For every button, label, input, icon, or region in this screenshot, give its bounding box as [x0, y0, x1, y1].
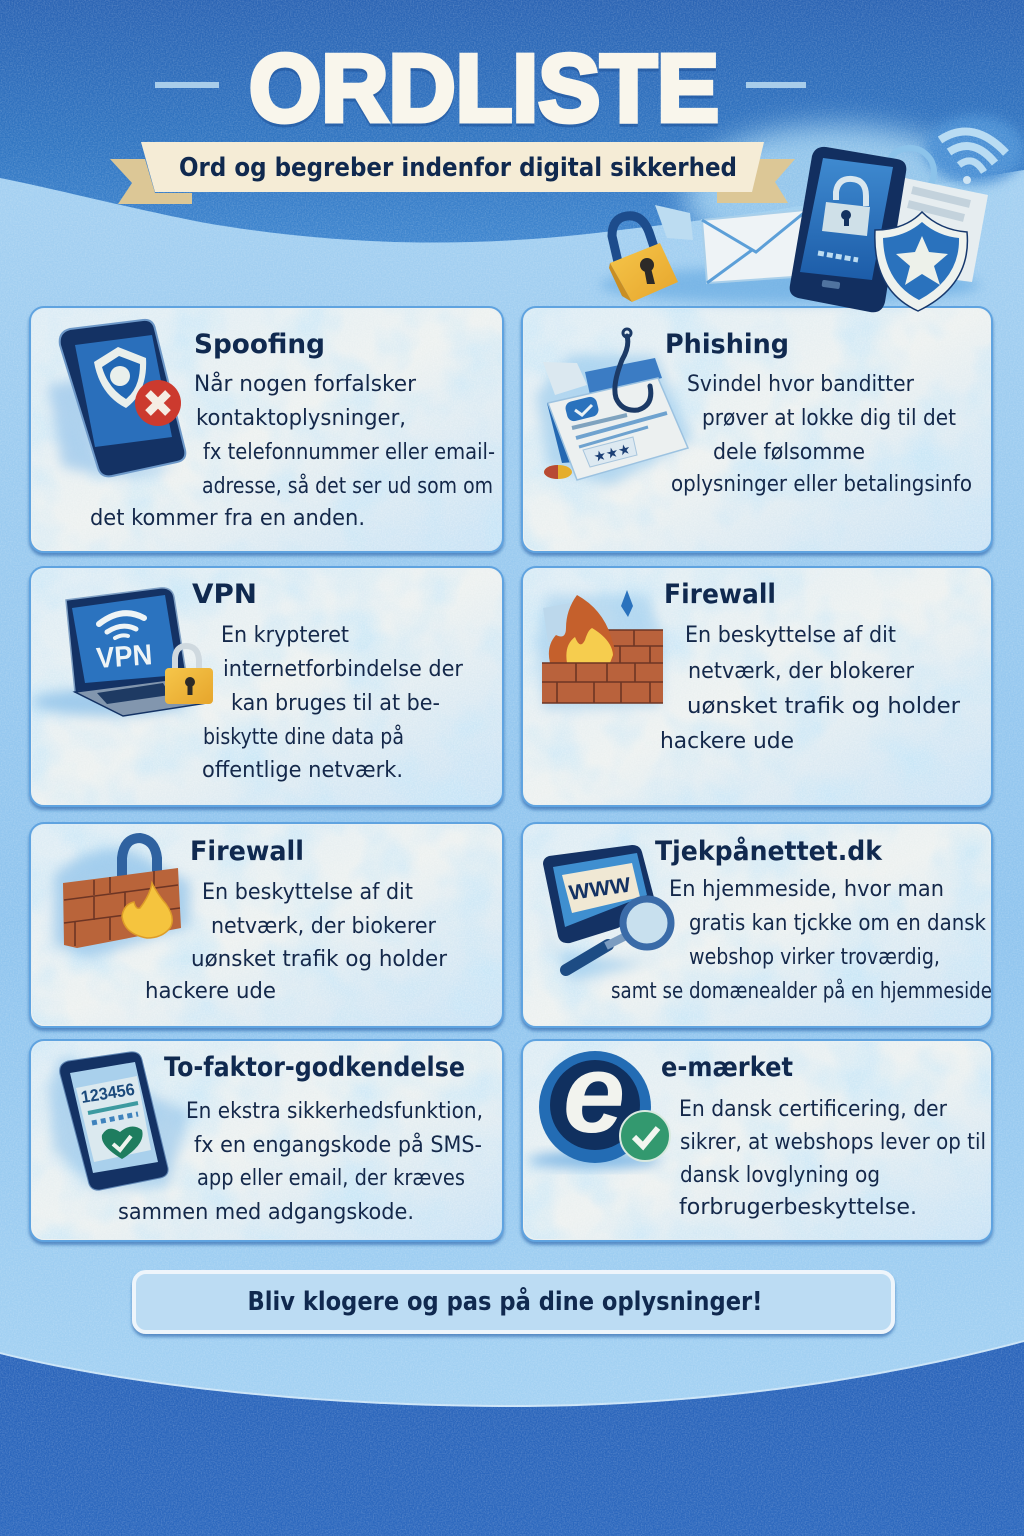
- description: det kommer fra en anden.: [90, 506, 365, 531]
- heading: e-mærket: [661, 1052, 793, 1083]
- description: uønsket trafik og holder: [687, 694, 961, 719]
- description: [671, 372, 972, 497]
- description: biskytte dine data på: [203, 724, 404, 750]
- description: Svindel hvor banditter: [687, 372, 915, 397]
- description: forbrugerbeskyttelse.: [679, 1195, 917, 1220]
- icon: envelope: [702, 210, 805, 283]
- description: sammen med adgangskode.: [118, 1200, 414, 1225]
- icon: e-maerket badge: [529, 1031, 670, 1168]
- icon: laptop with VPN and lock: [32, 588, 213, 716]
- description: En beskyttelse af dit: [202, 880, 413, 905]
- subtitle ribbon: Ord og begreber indenfor digital sikkerhed: [179, 153, 737, 183]
- heading: Spoofing: [194, 329, 325, 360]
- icon: phone with code: 123456: [80, 1080, 136, 1107]
- description: hackere ude: [145, 979, 276, 1004]
- description: [660, 623, 961, 754]
- description: [202, 623, 464, 783]
- icon: wifi: [940, 132, 1006, 184]
- subtitle ribbon: [110, 142, 795, 204]
- panel: To-faktor-godkendelse: [30, 1040, 503, 1241]
- panel: e-maerket: [522, 1031, 992, 1241]
- description: dansk lovglyning og: [680, 1163, 880, 1188]
- description: offentlige netværk.: [202, 758, 403, 783]
- heading: Tjekpånettet.dk: [655, 835, 883, 867]
- panel: Firewall right: [522, 567, 992, 806]
- description: oplysninger eller betalingsinfo: [671, 472, 972, 497]
- description: prøver at lokke dig til det: [702, 406, 956, 431]
- icon: fish hook and login page: ★★★: [592, 441, 633, 466]
- title: ORDLISTE: [249, 35, 719, 142]
- title: ORDLISTE: [249, 38, 719, 145]
- icon: phone with code: [48, 1052, 190, 1190]
- icon: document: [880, 178, 988, 282]
- description: fx telefonnummer eller email-: [203, 440, 495, 465]
- description: En krypteret: [221, 623, 349, 648]
- description: gratis kan tjckke om en dansk: [689, 911, 986, 936]
- heading: Firewall: [190, 836, 304, 867]
- description: kontaktoplysninger,: [196, 406, 406, 431]
- description: sikrer, at webshops lever op til: [680, 1130, 986, 1155]
- description: app eller email, der kræves: [197, 1166, 465, 1191]
- panel: Tjekpaanettet: [522, 823, 992, 1027]
- icon: padlock yellow: [609, 216, 678, 302]
- icon: star shield: [875, 212, 967, 311]
- description: En dansk certificering, der: [679, 1097, 948, 1122]
- footer banner: [134, 1272, 893, 1332]
- icon: signal ring: [886, 148, 934, 196]
- heading: VPN: [192, 579, 257, 610]
- description: En beskyttelse af dit: [685, 623, 896, 648]
- icon: browser and magnifier: [538, 845, 671, 982]
- panel: Spoofing: [30, 307, 503, 552]
- icon: flaming brick wall: [536, 590, 664, 710]
- description: uønsket trafik og holder: [191, 947, 448, 972]
- icon: phone with shield and X: [48, 320, 185, 476]
- description: netværk, der biokerer: [211, 914, 437, 939]
- description: kan bruges til at be-: [231, 691, 440, 716]
- panel: Firewall left: [30, 823, 503, 1027]
- description: adresse, så det ser ud som om: [202, 473, 493, 499]
- icon: laptop with VPN and lock: VPN: [95, 639, 153, 675]
- heading: To-faktor-godkendelse: [164, 1052, 465, 1083]
- description: [679, 1097, 986, 1220]
- description: hackere ude: [660, 729, 794, 754]
- panel: VPN: [30, 567, 503, 806]
- description: [90, 371, 495, 531]
- description: webshop virker troværdig,: [689, 945, 940, 970]
- icon: note: [655, 205, 693, 240]
- description: [145, 880, 448, 1004]
- description: [118, 1099, 483, 1225]
- footer banner: Bliv klogere og pas på dine oplysninger!: [248, 1285, 762, 1317]
- description: En ekstra sikkerhedsfunktion,: [186, 1099, 483, 1124]
- icon: fish hook and login page: [536, 329, 692, 486]
- panel: Phishing: [522, 307, 992, 552]
- icon: padlock on brick wall: [54, 838, 190, 958]
- description: fx en engangskode på SMS-: [194, 1132, 482, 1158]
- heading: Phishing: [665, 329, 789, 360]
- description: netværk, der blokerer: [688, 659, 915, 684]
- heading: Firewall: [664, 579, 776, 610]
- description: En hjemmeside, hvor man: [669, 877, 944, 902]
- icon: browser and magnifier: WWW: [567, 874, 632, 905]
- illustration: security devices: [600, 132, 1006, 312]
- description: internetforbindelse der: [223, 657, 464, 682]
- icon: phone with lock: [790, 147, 906, 312]
- description: Når nogen forfalsker: [194, 371, 417, 397]
- description: dele følsomme: [713, 440, 865, 465]
- description: [611, 877, 992, 1004]
- icon: e-maerket badge: e: [563, 1031, 625, 1156]
